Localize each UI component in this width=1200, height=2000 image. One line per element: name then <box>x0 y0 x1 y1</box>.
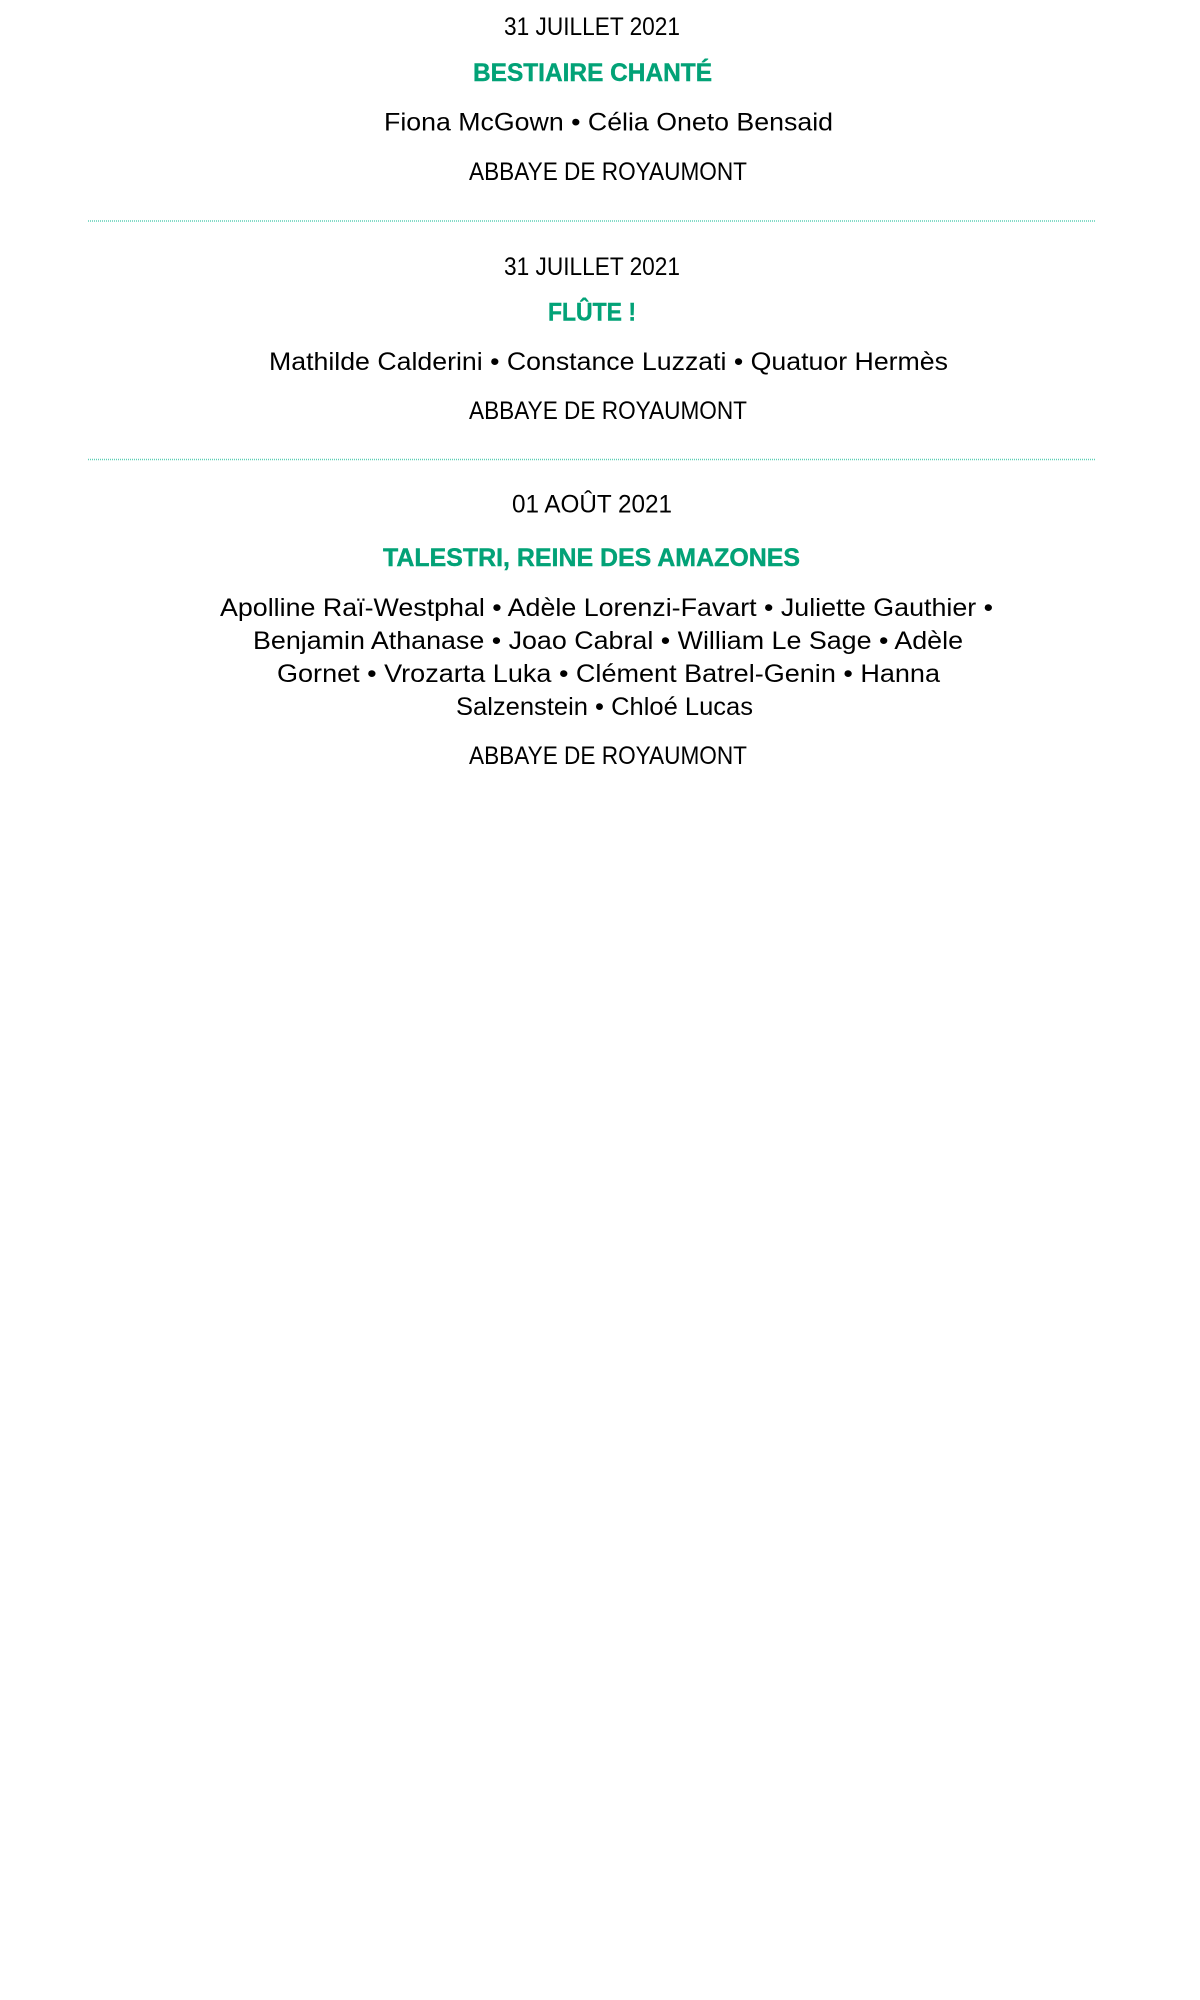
venue: ABBAYE DE ROYAUMONT <box>469 397 747 425</box>
venue: ABBAYE DE ROYAUMONT <box>469 742 747 770</box>
performers: Mathilde Calderini • Constance Luzzati • Quatuor Hermès <box>269 348 948 376</box>
heading: TALESTRI, REINE DES AMAZONES <box>383 544 800 572</box>
date: 31 JUILLET 2021 <box>504 13 680 41</box>
heading: BESTIAIRE CHANTÉ <box>473 58 712 87</box>
panel: concert Bestiaire chanté <box>384 13 833 186</box>
heading: FLÛTE ! <box>548 296 636 326</box>
performers: Gornet • Vrozarta Luka • Clément Batrel-Genin • Hanna <box>277 660 940 688</box>
panel: concert Flûte ! <box>269 253 948 425</box>
panel: concert Talestri, reine des Amazones <box>220 490 993 770</box>
venue: ABBAYE DE ROYAUMONT <box>469 158 747 186</box>
performers <box>220 594 993 721</box>
performers: Apolline Raï-Westphal • Adèle Lorenzi-Favart • Juliette Gauthier • <box>220 594 993 622</box>
performers: Fiona McGown • Célia Oneto Bensaid <box>384 108 833 136</box>
performers: Salzenstein • Chloé Lucas <box>456 693 753 721</box>
date: 01 AOÛT 2021 <box>512 490 672 518</box>
performers: Benjamin Athanase • Joao Cabral • William Le Sage • Adèle <box>253 627 963 655</box>
date: 31 JUILLET 2021 <box>504 253 680 281</box>
